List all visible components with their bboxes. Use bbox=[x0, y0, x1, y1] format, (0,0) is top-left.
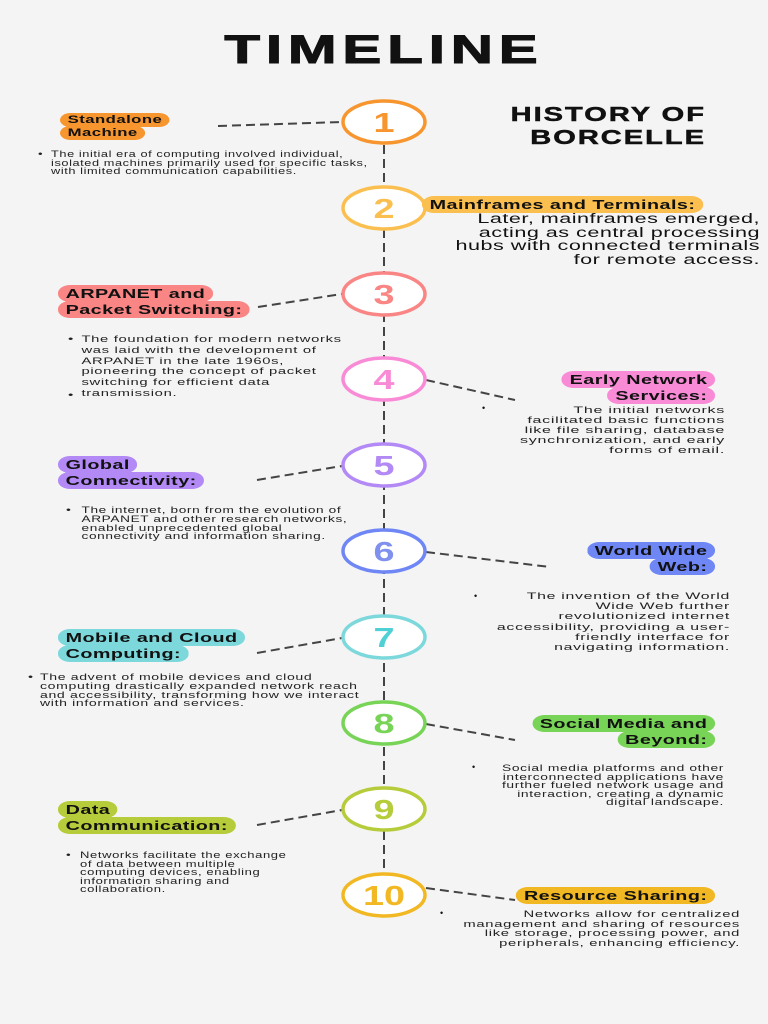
desc 2: Later, mainframes emerged, bbox=[477, 211, 760, 226]
desc 8: further fueled network usage and bbox=[502, 780, 724, 790]
desc 10: peripherals, enhancing efficiency. bbox=[499, 938, 740, 948]
label 8: Beyond: bbox=[625, 732, 707, 746]
desc 2: acting as central processing bbox=[479, 224, 760, 240]
bullet 10: • bbox=[440, 908, 443, 918]
timeline graphics: 4 bbox=[373, 365, 395, 396]
desc 1: isolated machines primarily used for specific tasks, bbox=[51, 158, 368, 168]
desc 10: Networks allow for centralized bbox=[524, 909, 740, 919]
desc 3: • bbox=[68, 390, 74, 400]
desc 3: ARPANET in the late 1960s, bbox=[81, 356, 284, 366]
subtitle: HISTORY OF bbox=[511, 104, 706, 126]
desc 4: forms of email. bbox=[609, 445, 725, 455]
desc 6: revolutionized internet bbox=[558, 611, 730, 621]
desc 7: with information and services. bbox=[40, 698, 245, 708]
label 3: ARPANET and bbox=[66, 286, 205, 301]
desc 2 bbox=[456, 211, 760, 266]
label 6 bbox=[588, 542, 715, 575]
desc 3 bbox=[68, 334, 342, 400]
desc 4: like file sharing, database bbox=[525, 425, 725, 435]
desc 3: transmission. bbox=[81, 388, 177, 398]
timeline graphics: 6 bbox=[373, 537, 395, 568]
label 5: Global bbox=[66, 457, 130, 472]
label 9 bbox=[58, 801, 236, 834]
subtitle bbox=[511, 104, 706, 149]
desc 7: • bbox=[28, 672, 34, 682]
desc 6: The invention of the World bbox=[527, 591, 730, 601]
desc 5: ARPANET and other research networks, bbox=[82, 514, 347, 524]
bullet 4: • bbox=[482, 403, 485, 413]
label 4: Early Network bbox=[570, 372, 707, 387]
label 6: Web: bbox=[658, 558, 707, 574]
desc 8 bbox=[502, 763, 724, 807]
label 9: Data bbox=[66, 802, 110, 817]
desc 5: enabled unprecedented global bbox=[82, 523, 282, 533]
desc 6: accessibility, providing a user- bbox=[497, 622, 730, 632]
timeline graphics: 7 bbox=[373, 623, 395, 654]
desc 3: • bbox=[68, 334, 74, 344]
desc 3: pioneering the concept of packet bbox=[81, 366, 317, 376]
label 4 bbox=[562, 371, 715, 404]
bullet 8: • bbox=[472, 762, 475, 772]
desc 5: • bbox=[66, 505, 72, 515]
desc 10 bbox=[463, 909, 740, 948]
label 7: Computing: bbox=[66, 646, 181, 660]
timeline graphics: 8 bbox=[373, 709, 395, 740]
timeline graphics: 9 bbox=[373, 795, 395, 826]
desc 1 bbox=[38, 149, 368, 176]
desc 6: friendly interface for bbox=[575, 632, 730, 642]
desc 8: Social media platforms and other bbox=[502, 763, 724, 773]
desc 4: The initial networks bbox=[573, 405, 725, 415]
desc 2: for remote access. bbox=[574, 252, 760, 266]
desc 9: • bbox=[66, 850, 71, 860]
desc 7: computing drastically expanded network reach bbox=[40, 681, 358, 691]
desc 6 bbox=[497, 591, 730, 652]
desc 1: The initial era of computing involved individual, bbox=[51, 149, 343, 159]
desc 7 bbox=[28, 672, 359, 708]
desc 7: and accessibility, transforming how we interact bbox=[40, 690, 359, 700]
timeline graphics: 5 bbox=[373, 451, 395, 482]
desc 4 bbox=[520, 405, 725, 455]
desc 3: The foundation for modern networks bbox=[81, 334, 342, 344]
desc 4: facilitated basic functions bbox=[527, 415, 725, 425]
desc 5 bbox=[66, 505, 347, 541]
desc 2: hubs with connected terminals bbox=[456, 238, 760, 253]
desc 10: like storage, processing power, and bbox=[485, 928, 740, 938]
desc 3: was laid with the development of bbox=[81, 345, 317, 355]
timeline graphics: 2 bbox=[373, 194, 395, 225]
label 8: Social Media and bbox=[540, 716, 707, 731]
desc 4: synchronization, and early bbox=[520, 435, 725, 445]
desc 9 bbox=[66, 850, 286, 894]
desc 9: Networks facilitate the exchange bbox=[80, 850, 286, 860]
desc 8: interconnected applications have bbox=[503, 772, 724, 782]
label 3 bbox=[58, 285, 250, 318]
label 1: Machine bbox=[68, 127, 138, 139]
label 5 bbox=[58, 456, 204, 489]
desc 1: with limited communication capabilities. bbox=[51, 166, 297, 176]
label 1 bbox=[60, 113, 170, 140]
title: TIMELINE bbox=[224, 28, 544, 72]
label 8 bbox=[532, 715, 715, 748]
desc 9: collaboration. bbox=[80, 884, 166, 894]
desc 5: The internet, born from the evolution of bbox=[82, 505, 341, 515]
desc 6: navigating information. bbox=[554, 642, 730, 652]
label 2: Mainframes and Terminals: bbox=[430, 197, 695, 212]
label 1: Standalone bbox=[68, 114, 162, 126]
desc 10: management and sharing of resources bbox=[463, 919, 740, 929]
label 7: Mobile and Cloud bbox=[66, 630, 238, 645]
label 6: World Wide bbox=[595, 543, 707, 558]
desc 5: connectivity and information sharing. bbox=[82, 531, 326, 541]
desc 7: The advent of mobile devices and cloud bbox=[40, 672, 312, 682]
label 4: Services: bbox=[615, 388, 707, 402]
desc 9: computing devices, enabling bbox=[80, 867, 260, 877]
desc 8: digital landscape. bbox=[606, 797, 724, 807]
desc 9: information sharing and bbox=[80, 876, 230, 886]
desc 9: of data between multiple bbox=[80, 859, 235, 869]
label 7 bbox=[58, 629, 245, 662]
desc 1: • bbox=[38, 149, 43, 159]
label 5: Connectivity: bbox=[66, 472, 197, 488]
desc 8: interaction, creating a dynamic bbox=[517, 789, 724, 799]
label 10: Resource Sharing: bbox=[524, 888, 707, 903]
label 3: Packet Switching: bbox=[66, 302, 242, 316]
timeline graphics: 3 bbox=[373, 280, 395, 311]
timeline graphics: 10 bbox=[363, 881, 405, 912]
subtitle: BORCELLE bbox=[530, 127, 706, 149]
timeline graphics: 1 bbox=[373, 108, 395, 139]
desc 3: switching for efficient data bbox=[81, 377, 270, 387]
label 9: Communication: bbox=[66, 818, 228, 832]
desc 6: Wide Web further bbox=[596, 601, 730, 611]
bullet 6: • bbox=[474, 591, 477, 601]
